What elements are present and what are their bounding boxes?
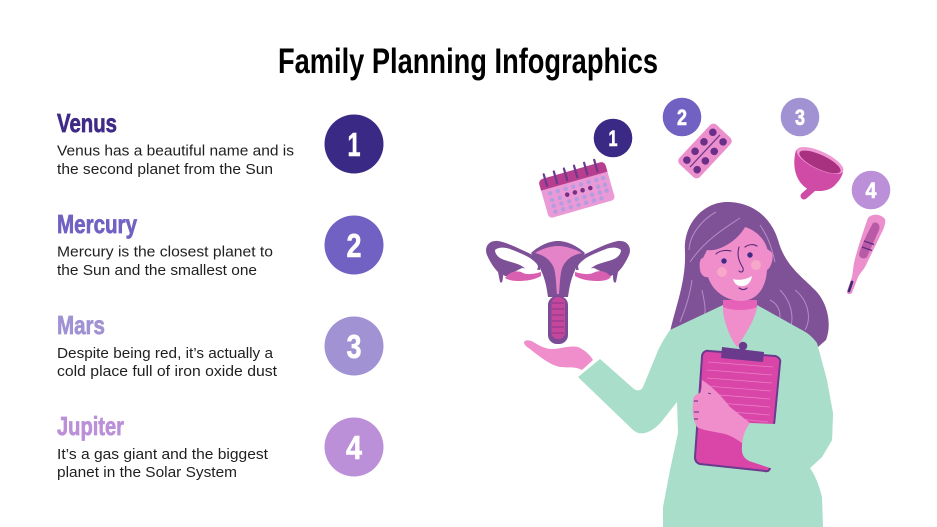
number badge 4: 4 [346,429,363,466]
title: Family Planning Infographics [278,42,658,81]
text: venus description: Venus has a beautiful name and is [57,142,294,160]
text: mercury description [57,244,273,279]
text: mars description: Despite being red, it’s actually a [57,345,274,362]
number badge 3 [324,316,384,376]
text: venus description: the second planet from the Sun [57,161,273,178]
small badge 1 [594,119,632,157]
small badge 3 [781,98,819,136]
small badge 2: 2 [677,105,687,130]
text: mars description: cold place full of iron oxide dust [57,363,278,380]
icon: pregnancy test [847,215,885,294]
vaginal canal [548,296,568,344]
right fallopian tube [576,241,630,283]
panel: mercury [57,209,384,279]
small badge 4: 4 [866,178,877,203]
coat [578,305,833,527]
number badge 2 [324,216,384,274]
small badge 3: 3 [795,105,805,130]
text: jupiter description: It’s a gas giant and the biggest [57,446,269,463]
heading: jupiter: Jupiter [57,411,124,441]
text: mercury description: Mercury is the closest planet to [57,244,273,260]
icon: uterus [486,241,630,344]
small badge 2 [663,98,701,136]
icon: calendar [537,157,615,219]
text: jupiter description: planet in the Solar System [57,464,237,481]
text: mars description [57,345,278,380]
text: jupiter description [57,446,269,481]
clipboard [695,351,780,471]
text: venus description [57,142,294,178]
heading: venus: Venus [57,108,117,138]
coat sleeve [742,395,833,468]
panel: venus [57,108,384,178]
illustration: doctor [524,202,833,527]
small badge 1: 1 [608,126,618,151]
right ovary [575,271,611,281]
left fallopian tube [486,241,540,283]
neck [723,300,757,347]
heading: mercury: Mercury [57,209,137,239]
face [700,227,773,301]
panel: mars [57,310,384,380]
number badge 2: 2 [346,227,362,264]
number badge 1 [324,114,384,174]
icon: pill pack [676,122,734,180]
panel: jupiter [57,411,384,481]
number badge 3: 3 [346,328,362,365]
text: mercury description: the Sun and the smallest one [57,262,257,279]
number badge 1: 1 [348,126,360,163]
left hand [524,340,593,370]
heading: mars: Mars [57,310,105,340]
number badge 4 [324,418,384,476]
clipboard clip [721,342,764,362]
hand on clipboard [693,380,750,443]
hair [670,202,829,355]
small badge 4 [852,171,890,209]
uterus body [531,241,585,297]
icon: menstrual cup [793,142,847,196]
left ovary [505,271,541,281]
